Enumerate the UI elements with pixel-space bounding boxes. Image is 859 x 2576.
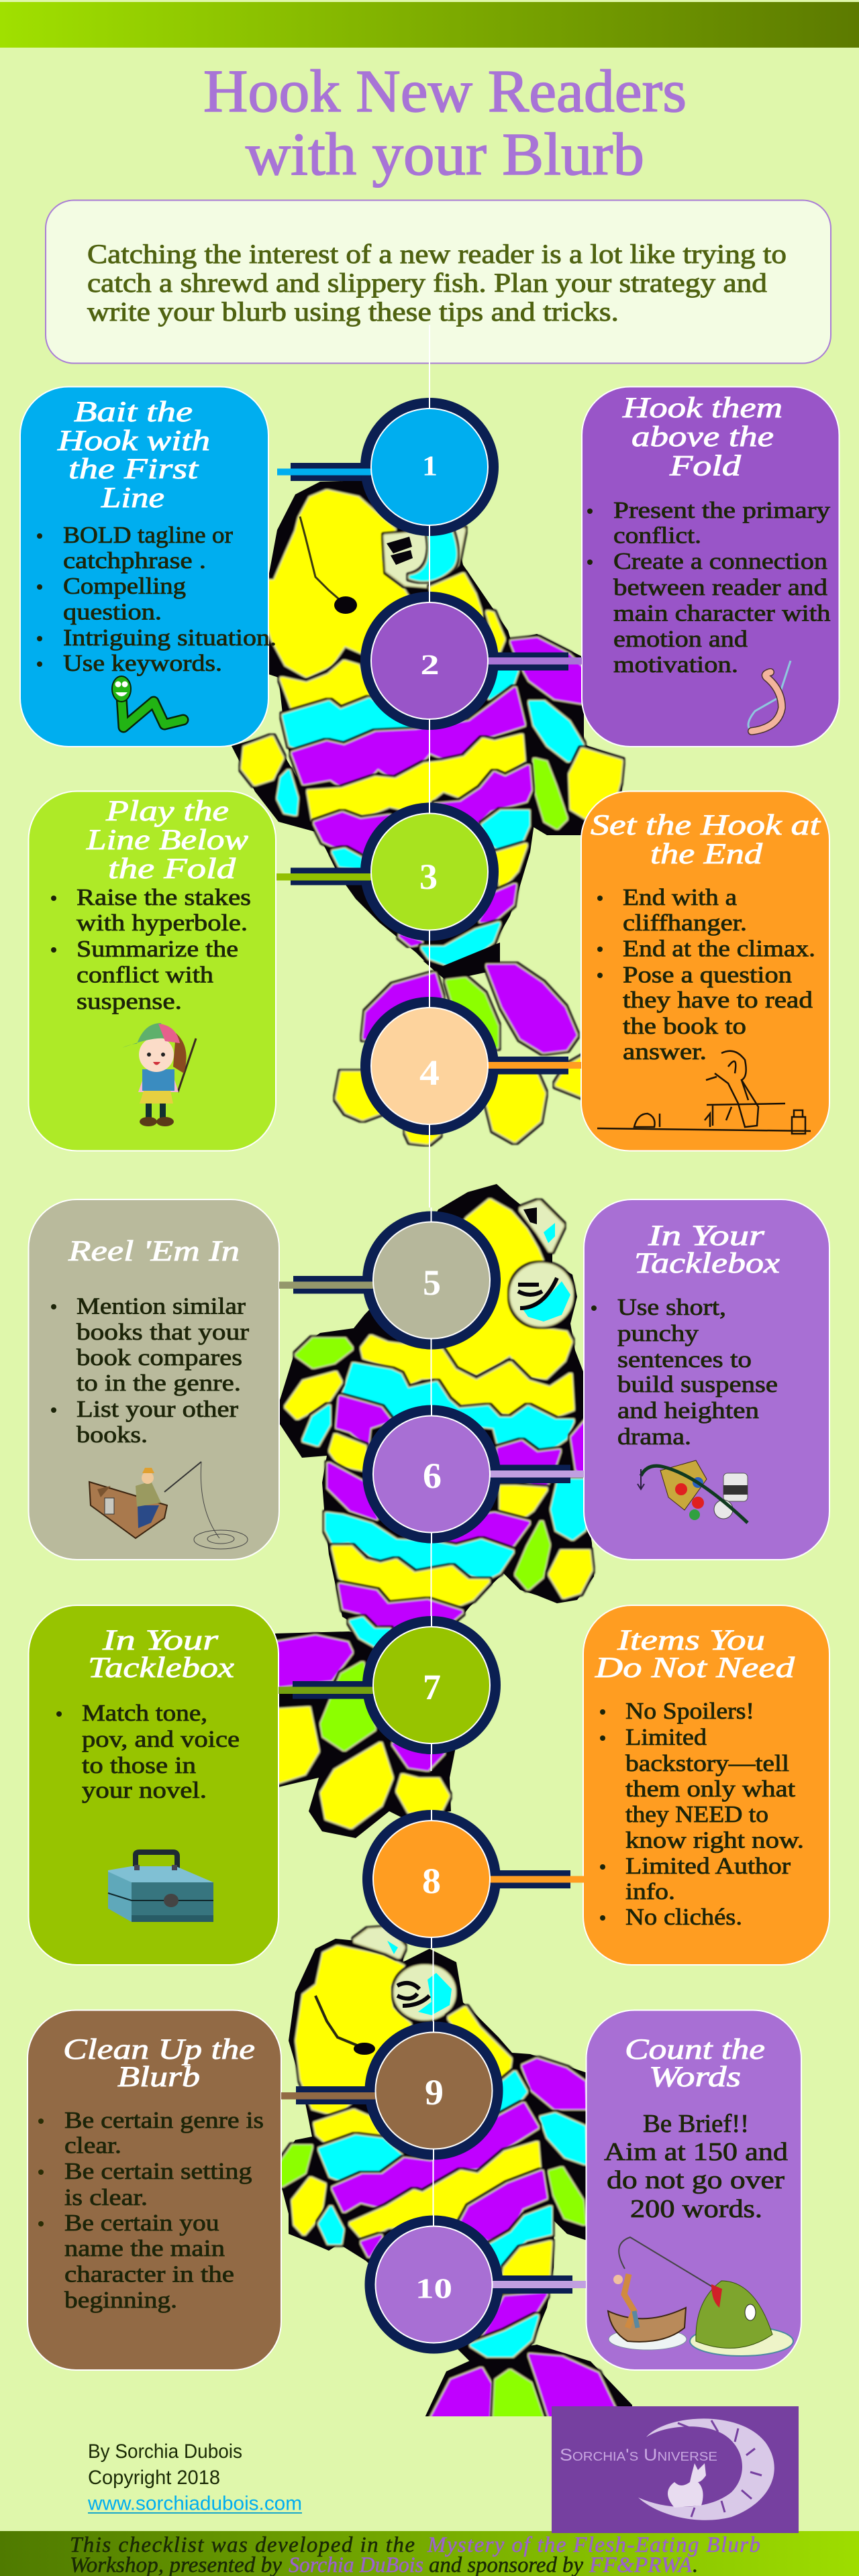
text block: Be Brief [604,2110,788,2223]
bullet list: Limited [625,1724,707,1750]
panel: step 6 In Your Tacklebox [584,1199,829,1560]
logo crescent moon [638,2418,774,2520]
heading: Play the Line Below the Fold: Line Below [86,824,248,856]
heading: Clean Up the Blurb [63,2034,255,2093]
heading: In Your Tacklebox: Tacklebox [88,1652,234,1684]
step 5 marker [279,1211,501,1350]
heading: Items You Do Not Need [595,1625,795,1684]
heading: In Your Tacklebox: In Your [648,1220,764,1252]
heading: Count the Words [625,2034,765,2093]
bullet list: books. [77,1421,148,1448]
heading: Hook them above the Fold [622,392,782,482]
icon: sketch of a person fishing [597,1051,811,1134]
panel: step 5 Reel 'Em In [28,1199,279,1560]
heading: Hook them above the Fold: Hook them [622,392,782,424]
bullet list: Match tone, [82,1700,207,1726]
bullet list: your novel. [82,1777,207,1803]
step 8 marker [362,1810,584,1948]
heading: Play the Line Below the Fold: Play the [105,796,229,827]
icon: pink worm on hook [748,661,791,733]
bullet list: they NEED to [625,1801,768,1827]
bullet list: character in the [64,2261,234,2288]
panel: step 2 Hook them above the Fold [582,386,839,747]
bullet list: is clear. [64,2184,148,2210]
bullet list: End with a [623,884,738,910]
footer note [70,2533,760,2576]
bullet list: main character with [613,600,831,627]
step 9 marker [281,2021,503,2160]
heading: Bait the Hook with the First Line: Line [101,482,164,514]
icon: girl with fishing rod [122,1023,196,1126]
heading: In Your Tacklebox [634,1220,780,1279]
step 10 marker: 10 [415,2274,452,2305]
logo wordmark: Sorchia's Universe [560,2446,717,2465]
bullet list: motivation. [613,651,738,678]
panel: step 3 Play the Line Below the Fold [28,792,276,1151]
panel: introduction: catch a shrewd and slippery fish. Plan your strategy and [87,268,767,298]
heading: Set the Hook at the End: Set the Hook at [591,810,821,841]
bullet list: punchy [617,1320,699,1346]
heading: Items You Do Not Need: Do Not Need [595,1652,795,1684]
step 1 marker: 1 [422,451,438,482]
bullet list: info. [625,1878,675,1904]
icon: fish two behind steps 5 to 8 [275,1184,594,1838]
heading: Set the Hook at the End [591,810,821,870]
bullet list: question. [63,598,162,625]
bullet list [38,2107,264,2313]
step 3 marker: 3 [419,857,438,897]
bullet list [597,884,815,1065]
panel: introduction: write your blurb using these tips and tricks. [87,297,619,327]
icon: fish three behind steps 9 and 10 [279,1925,632,2423]
icon: teal tackle box [108,1852,213,1922]
heading: Bait the Hook with the First Line: the First [68,453,199,485]
panel: introduction [46,200,831,364]
author credits [87,2440,302,2514]
heading: Set the Hook at the End: the End [650,839,763,870]
logo cat [668,2463,706,2508]
bullet list: conflict with [77,962,214,987]
bullet list: them only what [625,1776,795,1802]
top banner [0,2,859,48]
step 6 marker: 6 [423,1456,442,1496]
heading: Items You Do Not Need: Items You [617,1625,765,1656]
bullet list: End at the climax. [623,935,815,962]
panel: step 4 Set the Hook at the End [581,792,829,1151]
bullet list [51,884,251,1014]
step 7 marker: 7 [423,1667,441,1707]
step 7 marker [279,1616,501,1754]
step 1 marker [277,398,499,536]
bullet list: Be certain you [64,2210,219,2236]
heading: Clean Up the Blurb: Clean Up the [63,2034,255,2065]
text block: Be Brief: 200 words. [630,2195,762,2223]
step 4 marker: 4 [419,1053,440,1093]
panel: step 7 In Your Tacklebox [28,1605,279,1965]
bullet list: catchphrase . [63,547,206,574]
icon: fisherman hooking a giant fish [608,2237,793,2356]
bullet list: and heighten [617,1397,759,1424]
icon: fish one behind steps 1 to 4 [232,480,624,1142]
bullet list: book compares [77,1344,242,1371]
heading: Bait the Hook with the First Line: Bait the [74,396,193,428]
heading: Hook them above the Fold: above the [631,421,774,453]
step 5 marker: 5 [423,1263,441,1303]
step 2 marker: 2 [420,650,439,681]
bullet list: Present the primary [613,497,831,523]
bullet list: drama. [617,1424,691,1450]
author credits: Copyright 2018 [88,2467,220,2489]
bullet list: No Spoilers! [625,1698,754,1724]
bullet list: build suspense [617,1371,778,1397]
panel: introduction: Catching the interest of a new reader is a lot like trying to [87,239,787,269]
panel: step 1 Bait the Hook [20,386,276,747]
footer note: Mystery of the Flesh-Eating Blurb [427,2533,760,2557]
heading: Count the Words: Words [649,2061,741,2093]
heading: Clean Up the Blurb: Blurb [117,2061,200,2093]
bullet list [587,497,831,678]
bullet list: they have to read [623,987,813,1013]
panel: step 9 Clean Up the Blurb [28,2010,281,2370]
bullet list: with hyperbole. [77,910,248,936]
bullet list [37,522,276,676]
bullet list: Compelling [63,573,186,599]
bullet list: Raise the stakes [77,884,251,910]
bullet list: Be certain genre is [64,2107,264,2133]
bullet list: to in the genre. [77,1370,241,1396]
step 3 marker [276,802,499,941]
heading: Count the Words: Count the [625,2034,765,2065]
bullet list [51,1293,249,1448]
bullet list [591,1294,778,1450]
bullet list: conflict. [613,522,701,549]
author credits: www.sorchiadubois.com [87,2493,302,2514]
bullet list: pov, and voice [82,1726,240,1752]
bullet list: know right now. [625,1827,804,1853]
icon: green worm [112,676,183,727]
heading: In Your Tacklebox: In Your [102,1625,218,1656]
bullet list: Intriguing situation. [63,625,276,651]
title: Hook New Readers [203,58,687,125]
bullet list: Mention similar [77,1293,246,1319]
bullet list: suspense. [77,988,182,1014]
bullet list: List your other [77,1396,238,1422]
bullet list: the book to [623,1013,746,1039]
bullet list: Use short, [617,1294,726,1320]
heading: Bait the Hook with the First Line [57,396,210,514]
bullet list: cliffhanger. [623,910,747,936]
bullet list: clear. [64,2132,121,2159]
bullet list: Be certain setting [64,2158,252,2184]
title: with your Blurb [246,121,644,188]
step 8 marker: 8 [422,1861,441,1901]
footer note: This checklist was developed in the [70,2533,415,2557]
text block: Be Brief: Be Brief!! [643,2110,749,2138]
footer band [0,2531,859,2576]
step 2 marker [360,592,582,730]
bullet list: name the main [64,2235,225,2261]
step 10 marker [365,2215,586,2353]
bullet list: emotion and [613,626,748,652]
bullet list: backstory—tell [625,1750,789,1776]
bullet list: between reader and [613,574,828,600]
bullet list: answer. [623,1038,707,1065]
heading: Bait the Hook with the First Line: Hook with [57,425,210,457]
heading: Play the Line Below the Fold: the Fold [108,853,236,885]
bullet list: sentences to [617,1346,752,1373]
bullet list: BOLD tagline or [63,522,233,548]
bullet list: Create a connection [613,548,827,574]
heading: In Your Tacklebox [88,1625,234,1684]
panel: step 8 Items You Do Not Need [583,1605,829,1965]
heading: In Your Tacklebox: Tacklebox [634,1248,780,1279]
bullet list: to those in [82,1752,196,1778]
bullet list: Use keywords. [63,650,222,676]
step 4 marker [360,997,581,1135]
title [203,58,687,188]
heading: Hook them above the Fold: Fold [669,451,742,482]
text block: Be Brief: do not go over [607,2166,785,2194]
bullet list: No clichés. [625,1904,742,1930]
icon: fishing tackle pile [638,1460,748,1523]
heading: Play the Line Below the Fold [86,796,248,885]
logo: Sorchia's Universe [552,2406,799,2533]
step 6 marker [362,1405,584,1544]
bullet list: beginning. [64,2287,177,2313]
author credits: By Sorchia Dubois [88,2440,242,2463]
icon: man fishing in a boat [89,1462,248,1549]
bullet list: Pose a question [623,962,792,987]
bullet list: Summarize the [77,936,238,962]
heading: Reel 'Em In: Reel 'Em In [68,1236,240,1267]
bullet list: Limited Author [625,1853,791,1879]
step 9 marker: 9 [425,2072,444,2112]
panel: step 10 Count the Words [587,2010,801,2370]
bullet list [56,1700,240,1803]
text block: Be Brief: Aim at 150 and [604,2138,788,2166]
connector lines: white centre spine [430,325,434,2234]
bullet list: books that your [77,1319,249,1345]
bullet list [600,1698,804,1930]
